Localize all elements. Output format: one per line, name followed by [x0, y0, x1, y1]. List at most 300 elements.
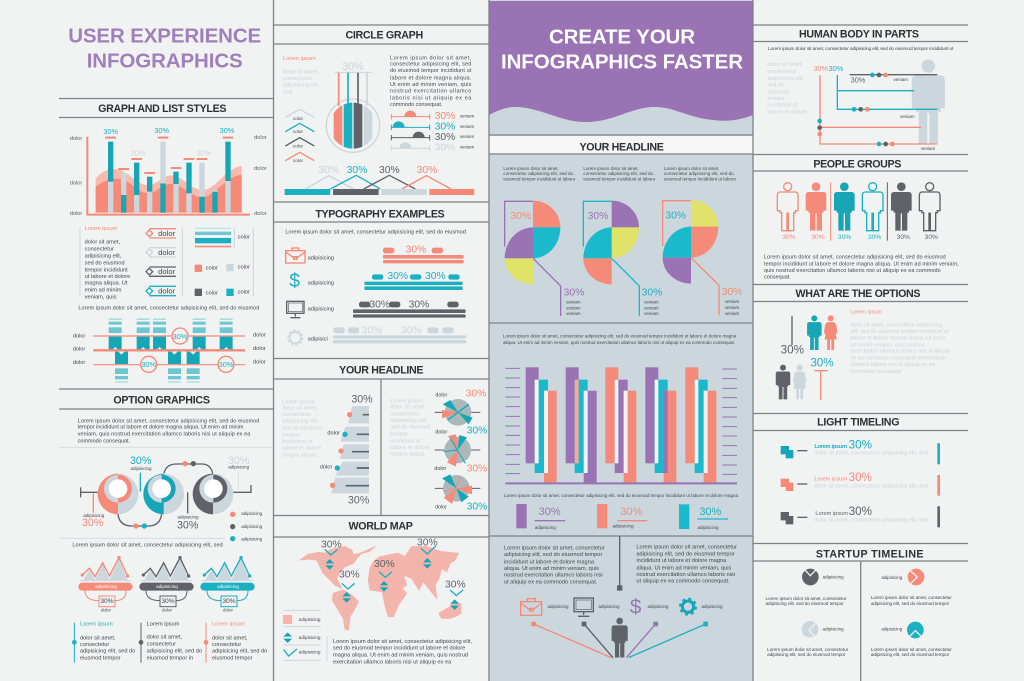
mini chart: teal: adipisicing	[217, 584, 239, 589]
panel: graph and list styles	[70, 103, 267, 383]
mini chart: coral: 30%	[100, 598, 114, 605]
left paragraph: aliqua. Ut enim ad minim veniam, quis	[504, 566, 599, 572]
ribbon: teal: 30%	[425, 271, 446, 282]
light text right: Lorem ipsum	[390, 399, 423, 405]
tag list: dolor	[158, 248, 176, 257]
light text right: incididunt ut	[390, 438, 421, 444]
icon: briefcase	[521, 599, 542, 615]
left paragraph: nostrud exercitation ullamco laboris nisi	[504, 573, 603, 579]
startup item: teal	[871, 622, 952, 657]
icon labels: adipisicing	[702, 604, 723, 609]
light text: labore et dolore	[767, 110, 807, 116]
bar and area chart	[70, 126, 267, 217]
map paragraph: Lorem ipsum dolor sit amet, consectetur adipisicing elit,	[333, 639, 472, 645]
color legend	[182, 227, 253, 297]
bar and area chart: dolor	[254, 166, 267, 172]
people pictograms: 30%	[897, 234, 910, 241]
tag list: dolor	[158, 267, 176, 276]
map legend: adipisicing	[299, 649, 321, 654]
slider rows: veniam	[460, 124, 474, 129]
list text: tempor incididunt	[85, 267, 128, 273]
startup item: teal: adipisicing	[881, 626, 903, 631]
world map: 30%	[321, 540, 342, 551]
paragraphs: eiusmod tempor incididunt ut labore	[664, 176, 736, 181]
map paragraph: exercitation ullamco laboris nisi ut aliquip ex ea	[333, 660, 452, 666]
startup item: teal: Lorem ipsum dolor sit amet, consectetur	[871, 647, 952, 652]
timeline strip: dolor	[253, 346, 266, 352]
light text: sed do	[767, 83, 784, 89]
left paragraph: adipisicing elit, sed do eiusmod tempor	[504, 552, 602, 558]
light text right: consectetur	[390, 411, 420, 417]
ring diagram: adipisicing	[228, 464, 250, 469]
segmented bar with peaks: 30%	[318, 165, 339, 176]
startup item: light: adipisicing	[823, 626, 844, 631]
ribbon: teal	[364, 271, 463, 290]
divider post	[617, 536, 622, 591]
list text: Lorem ipsum	[85, 226, 118, 232]
quarter chart 1: 30%	[564, 288, 584, 299]
map legend: adipisicing	[299, 635, 321, 640]
heading: GRAPH AND LIST STYLES	[98, 103, 226, 115]
your headline band	[489, 136, 753, 154]
timeling row: teal: dolor sit amet, consectetur adipisicing elit, sed	[814, 451, 928, 457]
timeling row: gray: 30%	[849, 505, 872, 518]
paragraph: aliqua. Ut enim ad minim veniam, quis nostrud exercitation ullamco laboris nisi ut aliquip ex ea commodo consequat.	[503, 340, 735, 345]
paragraphs: eiusmod tempor incididunt ut labore	[583, 176, 656, 181]
ribbon: light	[333, 325, 466, 343]
body diagram	[813, 59, 945, 151]
ribbon: light: 30%	[362, 325, 382, 336]
mini chart: gray: dolor	[162, 607, 172, 612]
chevron list: color	[293, 143, 303, 148]
quarter chart 3: veniam	[725, 299, 739, 304]
startup item: gray	[765, 567, 847, 606]
paragraph: laboris nisi ut aliquip ex ea	[390, 95, 472, 101]
bar and area chart: 30%	[131, 148, 146, 157]
ring diagram: adipisicing	[83, 513, 105, 518]
icon: gear	[680, 599, 696, 615]
paragraph: consectetur adipisicing elit, sed	[390, 61, 471, 67]
people pictograms: 30%	[868, 234, 881, 241]
funnel chart	[320, 394, 373, 506]
legend dots: adipisicing	[241, 524, 263, 529]
side text: sed	[283, 90, 292, 96]
panel: option graphics	[59, 394, 273, 663]
panel: human body and people groups	[764, 29, 959, 281]
paragraph: commodo consequat.	[390, 102, 443, 108]
people options graphic	[776, 315, 837, 400]
list text	[80, 226, 130, 300]
people pictograms: 30%	[838, 234, 851, 241]
page title: INFOGRAPHICS	[87, 50, 243, 73]
legend: purple	[516, 504, 565, 530]
panel: center bar chart and icons	[503, 333, 738, 658]
options text: ad minim veniam, quis nostrud	[850, 342, 925, 348]
people pictograms: 30%	[925, 234, 938, 241]
map paragraph: magna aliqua. Ut enim ad minim veniam, quis nostrud	[333, 653, 468, 659]
slider rows: 30%	[435, 111, 455, 122]
people pictograms: 30%	[811, 234, 825, 241]
icon labels: adipisicing	[308, 280, 334, 286]
note: coral: eiusmod tempor	[212, 655, 253, 661]
light text right: dolor sit amet,	[390, 405, 426, 411]
icon labels	[308, 255, 334, 342]
timeline strip: 30%	[173, 332, 188, 341]
mini chart: coral	[78, 556, 133, 612]
world map: 30%	[417, 538, 438, 549]
funnel chart: dolor	[320, 465, 332, 471]
note: gray: dolor sit amet,	[147, 635, 183, 641]
tag list	[146, 229, 176, 296]
bar and area chart: dolor	[70, 136, 82, 142]
people options graphic: 30%	[810, 357, 834, 370]
panel: center column background	[489, 0, 753, 681]
color legend: color	[238, 235, 250, 241]
ribbon: gray	[353, 299, 466, 318]
slider rows: veniam	[460, 113, 474, 118]
heading: circle graph: CIRCLE GRAPH	[345, 30, 423, 42]
light text left: Lorem ipsum	[282, 399, 315, 405]
timeline strip: 30%	[141, 360, 156, 369]
legend dots: adipisicing	[241, 536, 263, 541]
pie charts: dolor	[435, 505, 447, 511]
timeline strip: dolor	[73, 334, 85, 340]
body diagram: 30%	[829, 64, 844, 73]
options text: dolor sit amet, consectetur adipisicing	[850, 322, 942, 328]
list text: magna aliqua. Ut	[85, 281, 128, 287]
ring diagram: 30%	[177, 519, 199, 531]
world map: 30%	[374, 559, 395, 570]
right paragraph: ut aliquip ex ea commodo consequat.	[636, 578, 730, 584]
paragraph: Lorem ipsum dolor sit amet, consectetur adipisicing elit, sed do eiusmod	[78, 419, 259, 425]
pie charts: 30%	[467, 464, 487, 475]
paragraphs: Lorem ipsum dolor sit amet,	[503, 166, 559, 171]
ring diagram: 30%	[82, 517, 104, 529]
side text: dolor sit amet,	[283, 69, 319, 75]
light text: eiusmod	[767, 89, 789, 95]
caption: Lorem ipsum dolor sit amet, consectetur adipisicing elit, sed do eiusmod	[78, 306, 259, 312]
legend: coral: 30%	[620, 506, 643, 518]
quarter chart 2: veniam	[644, 305, 659, 310]
paragraph: nostrud exercitation ullamco	[390, 89, 471, 95]
timeling row: gray	[781, 505, 940, 527]
startup item: gray: adipisicing	[823, 574, 844, 579]
pie charts: 30%	[467, 426, 487, 437]
icon: dollar: $	[289, 271, 300, 292]
light text left: consectetur	[282, 412, 311, 418]
right paragraph	[636, 544, 737, 584]
options text	[850, 309, 950, 375]
timeling row: coral	[781, 471, 940, 496]
quarter chart 2: 30%	[642, 288, 662, 299]
chevron list	[285, 109, 314, 163]
light text left: sed do eiusmod	[282, 425, 322, 431]
quarter chart 3: 30%	[665, 210, 686, 221]
mini chart: gray: adipisicing	[156, 584, 178, 589]
options text: exercitation ullamco laboris nisi ut aliquip	[850, 349, 950, 355]
list text: adipisicing elit,	[85, 253, 122, 259]
panel: center pie charts	[503, 141, 742, 316]
light text right: labore et dolore	[390, 445, 430, 451]
paragraph: tempor incididunt ut labore et dolore magna aliqua. Ut enim ad minim	[78, 425, 244, 431]
legend: teal: 30%	[699, 506, 722, 518]
quarter chart 1: veniam	[566, 305, 581, 310]
panel: your headline and world map	[282, 365, 487, 666]
pie charts: dolor	[435, 430, 447, 436]
paragraph: do eiusmod tempor incididunt ut	[390, 68, 472, 74]
note: coral: dolor sit amet,	[212, 635, 248, 641]
icon: monitor	[287, 301, 304, 318]
body diagram: veniam	[900, 114, 915, 119]
funnel chart: 30%	[351, 394, 373, 406]
note: coral	[204, 621, 267, 663]
color legend: color	[238, 264, 250, 270]
note: gray: Lorem ipsum	[147, 621, 180, 627]
quarter chart 3	[663, 200, 742, 316]
legend: teal: adipisicing	[698, 525, 719, 530]
bar and area chart: 30%	[103, 127, 118, 136]
startup item: coral	[871, 566, 952, 606]
right paragraph: incididunt ut labore et dolore magna	[636, 558, 727, 564]
body diagram: veniam	[893, 77, 908, 82]
heading: OPTION GRAPHICS	[113, 394, 210, 406]
note: gray: adipisicing elit, sed do	[147, 649, 202, 655]
quarter chart 3: veniam	[725, 305, 739, 310]
map legend	[283, 610, 327, 661]
heading: startup timeline: STARTUP TIMELINE	[816, 548, 923, 560]
legend: purple: 30%	[539, 506, 561, 518]
note: gray	[139, 621, 202, 663]
heading: people groups: PEOPLE GROUPS	[813, 158, 901, 170]
quarter chart 2: veniam	[644, 311, 659, 316]
light text left: adipisicing elit,	[282, 419, 319, 425]
heading: options: WHAT ARE THE OPTIONS	[795, 288, 920, 300]
color legend: color	[206, 290, 218, 296]
paragraph: consequat.	[764, 275, 791, 281]
timeline strip: 30%	[219, 360, 234, 369]
world map: 30%	[445, 579, 466, 590]
note: teal: consectetur	[80, 642, 109, 648]
icon labels: adipisicing	[599, 604, 620, 609]
pie charts: 30%	[466, 389, 486, 400]
light text left: labore et dolore	[282, 446, 321, 452]
paragraphs: consectetur adipisicing elit, sed do	[503, 171, 573, 176]
ribbon: gray: 30%	[369, 299, 390, 310]
map paragraph: sed do eiusmod tempor incididunt ut labore et dolore	[333, 646, 465, 652]
paragraph: veniam, quis nostrud exercitation ullamco laboris nisi ut aliquip ex ea	[78, 431, 251, 437]
list text: enim ad minim	[85, 287, 122, 293]
bar and area chart: 30%	[197, 148, 212, 157]
note: coral: Lorem ipsum	[212, 621, 245, 627]
page title: USER EXPERIENCE	[68, 24, 261, 47]
timeling row: teal	[781, 438, 940, 464]
timeling row: coral: Lorem ipsum	[814, 477, 847, 483]
note: teal: Lorem ipsum	[80, 621, 113, 627]
stepped bar chart	[505, 367, 737, 483]
caption: Lorem ipsum dolor sit amet, consectetur adipisicing elit, sed do eiusmod	[285, 230, 466, 236]
right paragraph: aliqua. Ut enim ad minim veniam, quis	[636, 565, 732, 571]
heading: YOUR HEADLINE	[339, 365, 423, 377]
pie charts: 30%	[467, 501, 487, 512]
side text	[283, 56, 320, 96]
paragraphs: eiusmod tempor incididunt ut labore	[503, 176, 576, 181]
paragraphs: consectetur adipisicing elit, sed do	[664, 171, 734, 176]
right paragraph: nostrud exercitation ullamco laboris nisi	[636, 572, 735, 578]
tag list: dolor	[158, 286, 176, 295]
banner title	[501, 26, 743, 73]
note: teal: dolor sit amet,	[80, 635, 116, 641]
paragraph: Lorem ipsum dolor sit amet, consectetur adipisicing elit, sed do eiusmod	[764, 254, 946, 260]
paragraph	[390, 55, 472, 108]
list text: sed do eiusmod	[85, 260, 125, 266]
paragraph: Ut enim ad minim veniam, quis	[390, 82, 472, 88]
quarter chart 2: veniam	[644, 299, 659, 304]
timeline strip: dolor	[253, 359, 266, 365]
light text right	[390, 399, 430, 458]
people options graphic: 30%	[781, 343, 804, 356]
legend dots	[230, 511, 263, 541]
chevron list: color	[293, 158, 303, 163]
quarter chart 1: veniam	[566, 299, 581, 304]
paragraph: commodo consequat.	[78, 439, 131, 445]
light text right: magna aliqua.	[390, 452, 426, 458]
paragraphs: Lorem ipsum dolor sit amet,	[664, 166, 719, 171]
mini chart: teal: 30%	[222, 598, 236, 605]
segmented bar with peaks: 30%	[347, 165, 367, 176]
bar and area chart: dolor	[70, 180, 82, 186]
ring diagram: adipisicing	[178, 514, 199, 519]
quarter chart 2: 30%	[588, 211, 608, 222]
paragraphs: Lorem ipsum dolor sit amet,	[583, 166, 639, 171]
banner title: INFOGRAPHICS FASTER	[501, 50, 743, 73]
icon: briefcase	[286, 248, 305, 263]
note: coral: consectetur	[212, 642, 241, 648]
startup item: teal: adipisicing elit, sed do eiusmod tempor	[871, 652, 950, 657]
chevron list: color	[293, 116, 303, 121]
options text: ex ea commodo consequat exercitation	[850, 355, 946, 361]
options text: labore et dolore magna aliqua. Ut enim	[850, 336, 945, 342]
ring diagram: 30%	[130, 455, 152, 467]
quarter chart 2	[583, 201, 662, 316]
bar and area chart: dolor	[254, 135, 267, 141]
light text: incididunt ut	[767, 103, 798, 109]
slider rows: veniam	[460, 134, 474, 139]
paragraph	[503, 333, 737, 345]
timeline strip	[73, 318, 266, 383]
options text: ullamco laboris nisi ut aliquip ex ea	[850, 362, 936, 368]
legend: coral	[597, 504, 647, 528]
right paragraph: adipisicing elit, sed do eiusmod tempor	[636, 551, 735, 557]
caption: Lorem ipsum dolor sit amet, consectetur adipisicing elit, sed do eiusmod tempor incididunt ut	[768, 46, 954, 52]
segmented bar with peaks	[285, 165, 474, 195]
circle chart	[326, 61, 380, 152]
ribbon: coral: 30%	[406, 244, 426, 255]
circle chart: 30%	[342, 61, 364, 73]
map paragraph	[333, 639, 472, 666]
body diagram: 30%	[851, 76, 866, 85]
slider rows: 30%	[435, 122, 455, 133]
pie charts: dolor	[435, 393, 447, 399]
world map: 30%	[339, 570, 360, 581]
heading: light timeling: LIGHT TIMELING	[817, 417, 899, 429]
quarter chart 3: veniam	[725, 311, 739, 316]
slider rows	[391, 111, 474, 153]
mini chart: coral: dolor	[101, 607, 111, 612]
note: teal: adipisicing elit, sed do	[80, 649, 135, 655]
slider rows: veniam	[460, 144, 474, 149]
panel: header banner	[489, 1, 753, 122]
light text	[767, 62, 807, 116]
people pictograms	[777, 182, 940, 241]
slider rows: 30%	[435, 132, 455, 143]
light text left: dolor sit amet,	[282, 405, 318, 411]
body diagram: veniam	[921, 146, 935, 151]
icon: monitor	[574, 598, 593, 616]
panel: circle graph and typography	[283, 30, 474, 345]
mini chart: gray	[139, 556, 194, 612]
timeling row: teal: Lorem ipsum	[814, 444, 847, 450]
quarter chart 1	[505, 201, 584, 316]
options text: commodo consequat	[850, 369, 902, 375]
heading: YOUR HEADLINE	[579, 141, 664, 153]
people pictograms: 30%	[782, 234, 796, 241]
paragraph: Lorem ipsum dolor sit amet, consectetur adipisicing elit, sed do eiusmod tempor incididunt ut labore et dolore magna	[503, 333, 737, 338]
note: gray: consectetur	[147, 641, 176, 647]
caption: Lorem ipsum dolor sit amet, consectetur adipisicing elit, sed do eiusmod tempor incididunt ut labore et dolore magna	[504, 493, 738, 498]
list text: dolor sit amet,	[85, 239, 121, 245]
ring diagram	[81, 455, 251, 531]
slider rows: 30%	[435, 142, 455, 153]
timeline strip: dolor	[73, 360, 85, 366]
quarter chart 1: 30%	[510, 211, 531, 222]
mini chart: coral: adipisicing	[95, 584, 117, 589]
left paragraph: Lorem ipsum dolor sit amet, consectetur	[504, 545, 605, 551]
paragraph	[78, 419, 259, 445]
startup item: light	[767, 620, 849, 657]
heading: world map: WORLD MAP	[348, 520, 413, 532]
page title	[68, 24, 261, 73]
note: coral: adipisicing elit, sed do	[212, 649, 267, 655]
ribbon: teal: 30%	[387, 271, 408, 282]
bar and area chart: dolor	[254, 211, 267, 217]
tag list: dolor	[158, 229, 176, 238]
banner title: CREATE YOUR	[549, 26, 695, 49]
segmented bar with peaks: 30%	[417, 165, 437, 176]
world map	[300, 538, 466, 630]
note: teal: eiusmod tempor	[80, 655, 121, 661]
ribbon: light: 30%	[401, 325, 422, 336]
light text: consectetur	[767, 69, 797, 75]
light text: tempor	[767, 96, 785, 102]
legend: purple: adipisicing	[535, 525, 556, 530]
ring diagram: 30%	[228, 455, 250, 467]
icon labels: adipisicing	[308, 255, 334, 261]
startup item: coral: Lorem ipsum dolor sit amet, consectetur	[871, 595, 952, 600]
light text right: tempor	[390, 432, 408, 438]
icon: dollar: $	[630, 595, 642, 618]
light text right: adipisicing elit,	[390, 418, 428, 424]
paragraph	[764, 254, 959, 281]
startup item: light: Lorem ipsum dolor sit amet, consectetur	[767, 647, 849, 652]
light text left	[282, 399, 322, 458]
timeling row: gray: Lorem ipsum	[815, 511, 848, 517]
startup item: gray: adipisicing elit, sed do eiusmod tempor	[765, 601, 844, 606]
options text: elit, sed do eiusmod tempor incididunt ut	[850, 329, 949, 335]
paragraph: quis nostrud exercitation ullamco laboris nisi ut aliquip ex ea commodo	[764, 268, 941, 274]
startup item: light: adipisicing elit, sed do eiusmod tempor	[767, 652, 846, 657]
mini chart: gray: 30%	[161, 598, 175, 605]
icon labels: adipisicing	[548, 604, 569, 609]
